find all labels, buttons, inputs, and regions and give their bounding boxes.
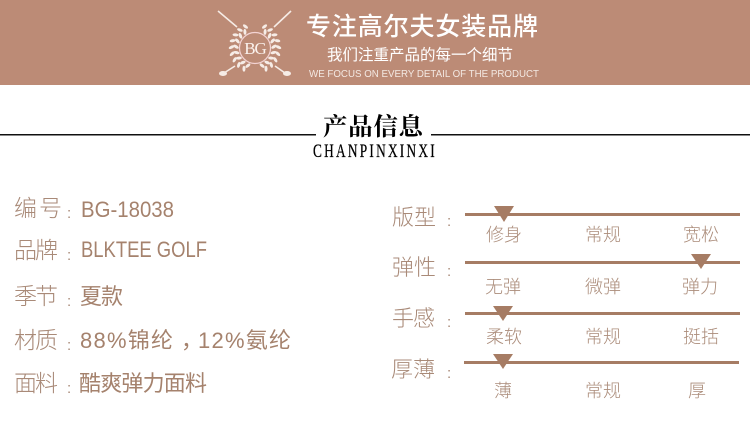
scale: thickness: 厚薄 [391,357,435,382]
row: season: 夏款 [80,284,123,309]
header banner [0,0,750,85]
heading: 产品信息: 产品信息 [323,113,424,141]
scale: thickness: 薄 [494,381,512,401]
English tagline: WE FOCUS ON EVERY DETAIL OF THE PRODUCT [309,68,540,80]
scale: thickness [391,354,739,401]
product attributes list [14,195,291,397]
heading: CHANPINXINXI: CHANPINXINXI [313,142,435,162]
row: season: : [67,293,71,310]
scale: hand feel: 手感 [392,306,435,331]
scale: thickness: : [447,365,451,382]
row: brand: BLKTEE GOLF [81,237,207,262]
scale: thickness: 厚 [688,381,706,401]
scale: hand feel: : [447,314,451,331]
row: material: ， [181,328,203,353]
scale: thickness: 常规 [585,381,621,401]
row: material: : [67,337,71,354]
row: material [14,327,291,354]
row: brand: : [67,247,71,264]
title: 专注高尔夫女装品牌: 专注高尔夫女装品牌 [306,13,538,41]
icon: golf club logo: BG [244,39,267,58]
attribute scales [391,205,740,401]
scale: elasticity: 无弹 [485,277,521,297]
scale: elasticity [392,254,740,297]
scale: elasticity: : [447,263,451,280]
scale: fit [392,205,740,245]
row: fabric [14,370,207,397]
scale: fit: 常规 [585,225,621,245]
row: material: 88%锦纶 [80,328,173,353]
row: fabric: : [67,380,71,397]
row: item number: BG-18038 [81,197,174,222]
scale: fit: 宽松 [683,225,719,245]
scale: hand feel: 常规 [585,327,621,347]
row: material: 材质 [14,327,58,353]
scale: elasticity: 弹力 [682,277,718,297]
row: material: 12%氨纶 [198,328,291,353]
row: fabric: 酷爽弹力面料 [79,371,207,396]
row: season: 季节 [14,283,58,309]
scale: hand feel [392,306,740,347]
scale: hand feel: 柔软 [486,327,522,347]
scale: fit: 修身 [486,225,522,245]
row: item number: : [67,205,71,222]
row: item number: 编号 [14,195,62,221]
scale: elasticity: 弹性 [392,255,436,280]
row: brand [14,237,207,264]
section heading [0,113,750,162]
scale: fit: 版型 [392,205,436,230]
row: brand: 品牌 [14,237,58,263]
scale: fit: : [447,213,451,230]
row: item number [14,195,174,222]
subtitle: 我们注重产品的每一个细节: 我们注重产品的每一个细节 [327,46,513,64]
icon: golf club logo [218,11,291,76]
row: season [14,283,123,310]
row: fabric: 面料 [14,370,58,396]
scale: elasticity: 微弹 [585,277,621,297]
scale: hand feel: 挺括 [683,327,719,347]
